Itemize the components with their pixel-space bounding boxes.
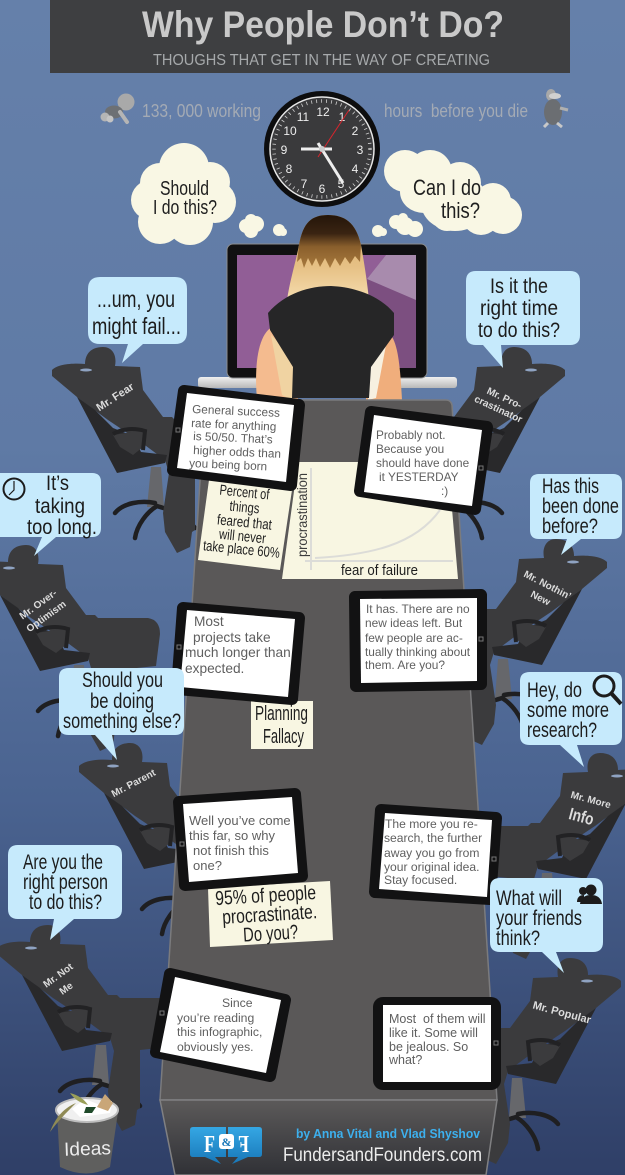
bubble: are you the right person: right person (23, 871, 108, 894)
tablet: come this far: this far, so why (189, 828, 275, 843)
sticky note: percent feared: feared that (216, 512, 273, 534)
tablet: come this far: Well you’ve come (189, 813, 291, 828)
person: Mr. More Info: Info (567, 804, 596, 829)
tablet: most of them: Most of them will (389, 1012, 486, 1026)
tablet: since you're reading: you’re reading (177, 1011, 254, 1025)
tablet: most projects (177, 608, 299, 699)
clock: 2 (352, 124, 359, 138)
thought cloud right: Can I do (413, 175, 481, 200)
person: Mr. Procrastinator (380, 347, 565, 553)
bubble: has this been done: before? (542, 515, 598, 538)
x axis label: fear of failure (341, 562, 418, 579)
tablet: no new ideas: them. Are you? (365, 658, 445, 672)
tablet: probably not (360, 412, 487, 509)
clock: 6 (319, 182, 326, 196)
tablet: probably not: it YESTERDAY (379, 470, 459, 484)
bubble: are you the right person: to do this? (29, 891, 102, 914)
bubble: it's taking too long: taking (35, 495, 85, 518)
bubble: um you might fail: might fail... (92, 313, 181, 339)
sticky note: percent feared: things (229, 499, 260, 517)
laptop (198, 244, 457, 388)
tablet: the more you research: search, the further (384, 831, 482, 845)
clock: 1 (339, 110, 346, 124)
woman at desk (256, 215, 402, 400)
icon: old man (544, 89, 568, 127)
tablet: probably not: Because you (376, 442, 444, 456)
bubble: um you might fail (88, 277, 187, 363)
tablet: most of them: like it. Some will (389, 1026, 478, 1040)
tablet: probably not: Probably not. (376, 428, 446, 442)
thought cloud right: this? (441, 198, 480, 223)
clock: 8 (286, 162, 293, 176)
bubble: has this been done: Has this (542, 475, 599, 498)
byline: by Anna Vital and Vlad Shyshov (296, 1126, 481, 1141)
bubble: are you the right person: Are you the (23, 851, 103, 874)
tablet: success rate: General success (192, 402, 280, 420)
tablet: most projects: much longer than (185, 645, 291, 660)
tablet: the more you research: away you go from (384, 846, 479, 860)
thought cloud left (131, 143, 236, 245)
logo: F&F: F (204, 1132, 215, 1158)
tablet: no new ideas: few people are ac- (365, 631, 463, 645)
bubble: should you be doing: something else? (63, 710, 181, 733)
sticky note: 95 percent (208, 881, 333, 947)
tablet: most projects: Most (194, 614, 224, 629)
person: Mr. Procrastinator: crastinator (472, 394, 524, 426)
tablet: the more you research: The more you re- (385, 817, 478, 831)
logo: F&F: F (238, 1132, 249, 1158)
tablet: since you're reading: Since (222, 996, 253, 1010)
bubble: should you be doing: Should you (82, 669, 163, 692)
tablet: success rate: rate for anything (191, 416, 277, 434)
clock: 9 (281, 143, 288, 157)
logo: F&F (190, 1127, 262, 1164)
person: Mr. Popular: Mr. Popular (531, 1000, 593, 1027)
bubble: it's taking too long (0, 472, 101, 556)
tablet: come this far: not finish this (193, 843, 269, 858)
clock: 12 (316, 105, 330, 119)
bubble: are you the right person (8, 845, 122, 940)
thought puffs (239, 213, 423, 238)
sticky note: planning fallacy: Planning (255, 703, 308, 725)
tablet: no new ideas (355, 595, 483, 686)
icon: friends (577, 884, 602, 904)
thought cloud left: Should (160, 178, 209, 200)
bubble: hey do some more research (520, 672, 622, 767)
sticky note: 95 percent: procrastinate. (222, 901, 318, 929)
bubble: should you be doing: be doing (90, 690, 154, 713)
sticky note: percent feared (198, 480, 292, 570)
y axis label: procrastination (294, 473, 310, 557)
bubble: what will your friends think (490, 878, 603, 973)
person: Mr. Nothin' New (422, 539, 607, 745)
sticky note: percent feared: will never (217, 527, 267, 547)
sticky note: planning fallacy: Fallacy (263, 726, 304, 748)
tablet: probably not: :) (441, 484, 448, 498)
tablet: the more you research: your original idea. (384, 860, 479, 874)
person: Mr. Parent: Mr. Parent (110, 767, 158, 800)
person: Mr. Popular (436, 958, 621, 1164)
chart paper (282, 462, 458, 579)
working hours text right: hours before you die (384, 101, 528, 121)
person: Mr. Not Me: Me (58, 980, 76, 998)
bubble: hey do some more research: Hey, do (527, 679, 582, 702)
tablet: no new ideas: It has. There are no (366, 602, 470, 616)
icon: baby (100, 94, 134, 122)
tablet: most of them: be jealous. So (389, 1040, 468, 1054)
tablet: come this far (179, 794, 302, 885)
bubble: is it the right time: right time (480, 297, 558, 320)
person: Mr. Not Me (0, 925, 182, 1131)
sticky note: 95 percent: 95% of people (215, 882, 317, 910)
clock (264, 91, 380, 207)
bubble: what will your friends think: What will (496, 887, 562, 910)
person: Mr. More Info: Mr. More (569, 790, 612, 811)
tablet: most projects: projects take (193, 630, 271, 645)
tablet: the more you research (375, 810, 496, 899)
clock: 4 (352, 162, 359, 176)
tablet: probably not: should have done (376, 456, 470, 470)
trash can: ideas: Ideas (64, 1138, 111, 1161)
clock: 11 (297, 110, 310, 124)
sticky note: percent feared: Percent of (219, 483, 271, 504)
person: Mr. Over-Optimism: Optimism (25, 599, 69, 635)
person: Mr. Procrastinator: Mr. Pro- (485, 386, 523, 412)
clock: 10 (283, 124, 297, 138)
bubble: um you might fail: ...um, you (97, 286, 175, 312)
tablet: the more you research: Stay focused. (384, 873, 457, 887)
thought cloud left: I do this? (153, 197, 217, 219)
subtitle: THOUGHS THAT GET IN THE WAY OF CREATING (153, 52, 490, 69)
thought cloud right (384, 150, 522, 235)
person: Mr. Parent (79, 743, 264, 949)
bubble: it's taking too long: too long. (27, 516, 97, 539)
website: FundersandFounders.com (283, 1145, 482, 1166)
icon: clock (4, 478, 24, 500)
person: Mr. Nothin' New: New (528, 589, 552, 608)
bubble: hey do some more research: research? (527, 719, 597, 742)
bubble: should you be doing (59, 668, 184, 760)
trash can: ideas (50, 1093, 118, 1174)
tablet: since you're reading (156, 974, 285, 1076)
bubble: what will your friends think: your friends (496, 907, 582, 930)
icon: magnifier (594, 676, 621, 704)
clock: 7 (301, 177, 308, 191)
sticky note: percent feared: take place 60% (202, 538, 281, 562)
tablet: most of them: what? (388, 1053, 422, 1067)
tablet: come this far: one? (193, 858, 222, 873)
tablet: success rate: is 50/50. That’s (193, 429, 273, 446)
tablet: success rate (173, 391, 299, 485)
bubble: is it the right time (466, 271, 580, 368)
person: Mr. Nothin' New: Mr. Nothin’ (522, 569, 573, 602)
tablet: most of them (373, 997, 501, 1090)
person: Mr. More Info (466, 753, 625, 959)
bubble: is it the right time: to do this? (478, 319, 560, 342)
person: Mr. Fear (52, 347, 237, 553)
clock: 5 (338, 177, 345, 191)
bubble: has this been done (530, 474, 622, 555)
person: Mr. Not Me: Mr. Not (42, 961, 76, 990)
header banner (50, 0, 570, 73)
tablet: success rate: you being born (189, 456, 267, 473)
clock: 3 (357, 143, 364, 157)
tablet: no new ideas: tually thinking about (365, 645, 471, 659)
bubble: it's taking too long: It’s (46, 472, 69, 495)
person: Mr. Over-Optimism (0, 545, 160, 751)
working hours text left: 133, 000 working (142, 101, 261, 121)
bubble: what will your friends think: think? (496, 927, 540, 950)
tablet: no new ideas: new ideas left. But (365, 616, 463, 630)
title: Why People Don’t Do? (142, 4, 504, 45)
tablet: most projects: expected. (185, 661, 244, 676)
person: Mr. Fear: Mr. Fear (94, 381, 137, 414)
tablet: since you're reading: this infographic, (177, 1025, 262, 1039)
sticky note: planning fallacy (251, 701, 313, 749)
tablet: success rate: higher odds than (193, 443, 281, 461)
tablet: since you're reading: obviously yes. (177, 1040, 254, 1054)
bubble: is it the right time: Is it the (490, 275, 548, 298)
logo: F&F: & (222, 1135, 232, 1149)
conference table (160, 400, 497, 1175)
sticky note: 95 percent: Do you? (243, 921, 299, 947)
person: Mr. Over-Optimism: Mr. Over- (18, 588, 59, 622)
